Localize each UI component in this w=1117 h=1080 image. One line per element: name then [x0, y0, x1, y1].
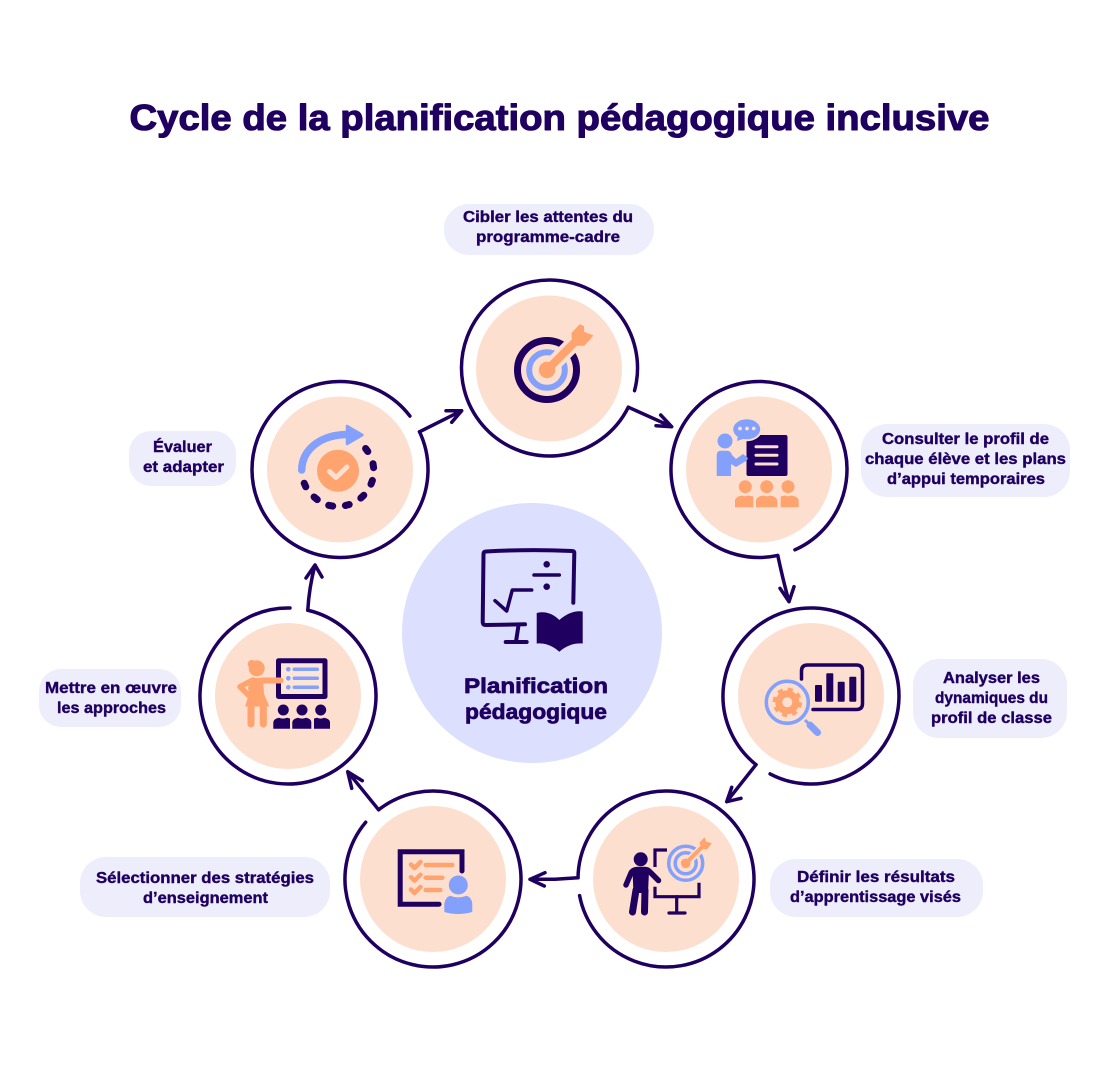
icon: teacher with board and students	[717, 417, 799, 507]
central hub	[402, 503, 662, 763]
title: Cycle de la planification pédagogique inclusive	[130, 97, 990, 138]
label: step 5: Sélectionner des stratégies	[96, 870, 314, 887]
label: step 5: d’enseignement	[143, 890, 268, 907]
arrow: step 6 to 7	[306, 565, 322, 610]
label: step 7	[129, 431, 236, 486]
hub label: pédagogique	[465, 700, 607, 724]
label: step 3: Analyser les	[943, 670, 1040, 687]
label: step 4	[770, 859, 983, 917]
label: step 2: Consulter le profil de	[882, 431, 1049, 448]
icon: board and book	[483, 550, 583, 652]
icon: chart and magnifier	[766, 665, 862, 732]
icon: teacher pointing at board with students	[240, 660, 330, 729]
label: step 1	[444, 204, 654, 255]
step 3: analysis	[723, 608, 899, 784]
step 5: strategies	[345, 791, 521, 967]
label: step 2	[861, 424, 1070, 497]
step 7: evaluate	[252, 381, 428, 557]
step 1: target	[462, 280, 638, 456]
label: step 1: programme-cadre	[476, 229, 620, 246]
label: step 7: Évaluer	[153, 439, 212, 456]
label: step 3: profil de classe	[931, 710, 1052, 727]
label: step 6: les approches	[57, 700, 166, 717]
arrow: step 7 to 1	[420, 411, 462, 432]
label: step 2: chaque élève et les plans	[865, 451, 1066, 468]
label: step 7: et adapter	[143, 459, 224, 476]
label: step 1: Cibler les attentes du	[463, 209, 633, 226]
icon: cycle arrow with check	[302, 426, 374, 506]
icon: checklist with person	[400, 852, 472, 914]
label: step 2: d’appui temporaires	[887, 471, 1045, 488]
label: step 3	[913, 659, 1067, 738]
step 2: profile	[671, 382, 847, 558]
arrow: step 1 to 2	[628, 407, 672, 427]
step 6: implementation	[200, 608, 376, 784]
arrow: step 3 to 4	[727, 765, 756, 802]
hub label: Planification	[464, 674, 608, 698]
label: step 4: d’apprentissage visés	[790, 889, 961, 906]
icon: target with arrow	[518, 325, 592, 400]
step 4: outcomes	[578, 791, 754, 967]
arrow: step 4 to 5	[530, 873, 578, 886]
label: step 6	[39, 669, 181, 727]
label: step 3: dynamiques du	[935, 690, 1048, 707]
icon: person and target board	[626, 838, 711, 913]
arrow: step 5 to 6	[348, 772, 379, 810]
label: step 6: Mettre en œuvre	[45, 680, 177, 697]
arrow: step 2 to 3	[778, 555, 794, 602]
label: step 5	[80, 857, 330, 917]
label: step 4: Définir les résultats	[797, 869, 955, 886]
hub label	[464, 674, 608, 724]
